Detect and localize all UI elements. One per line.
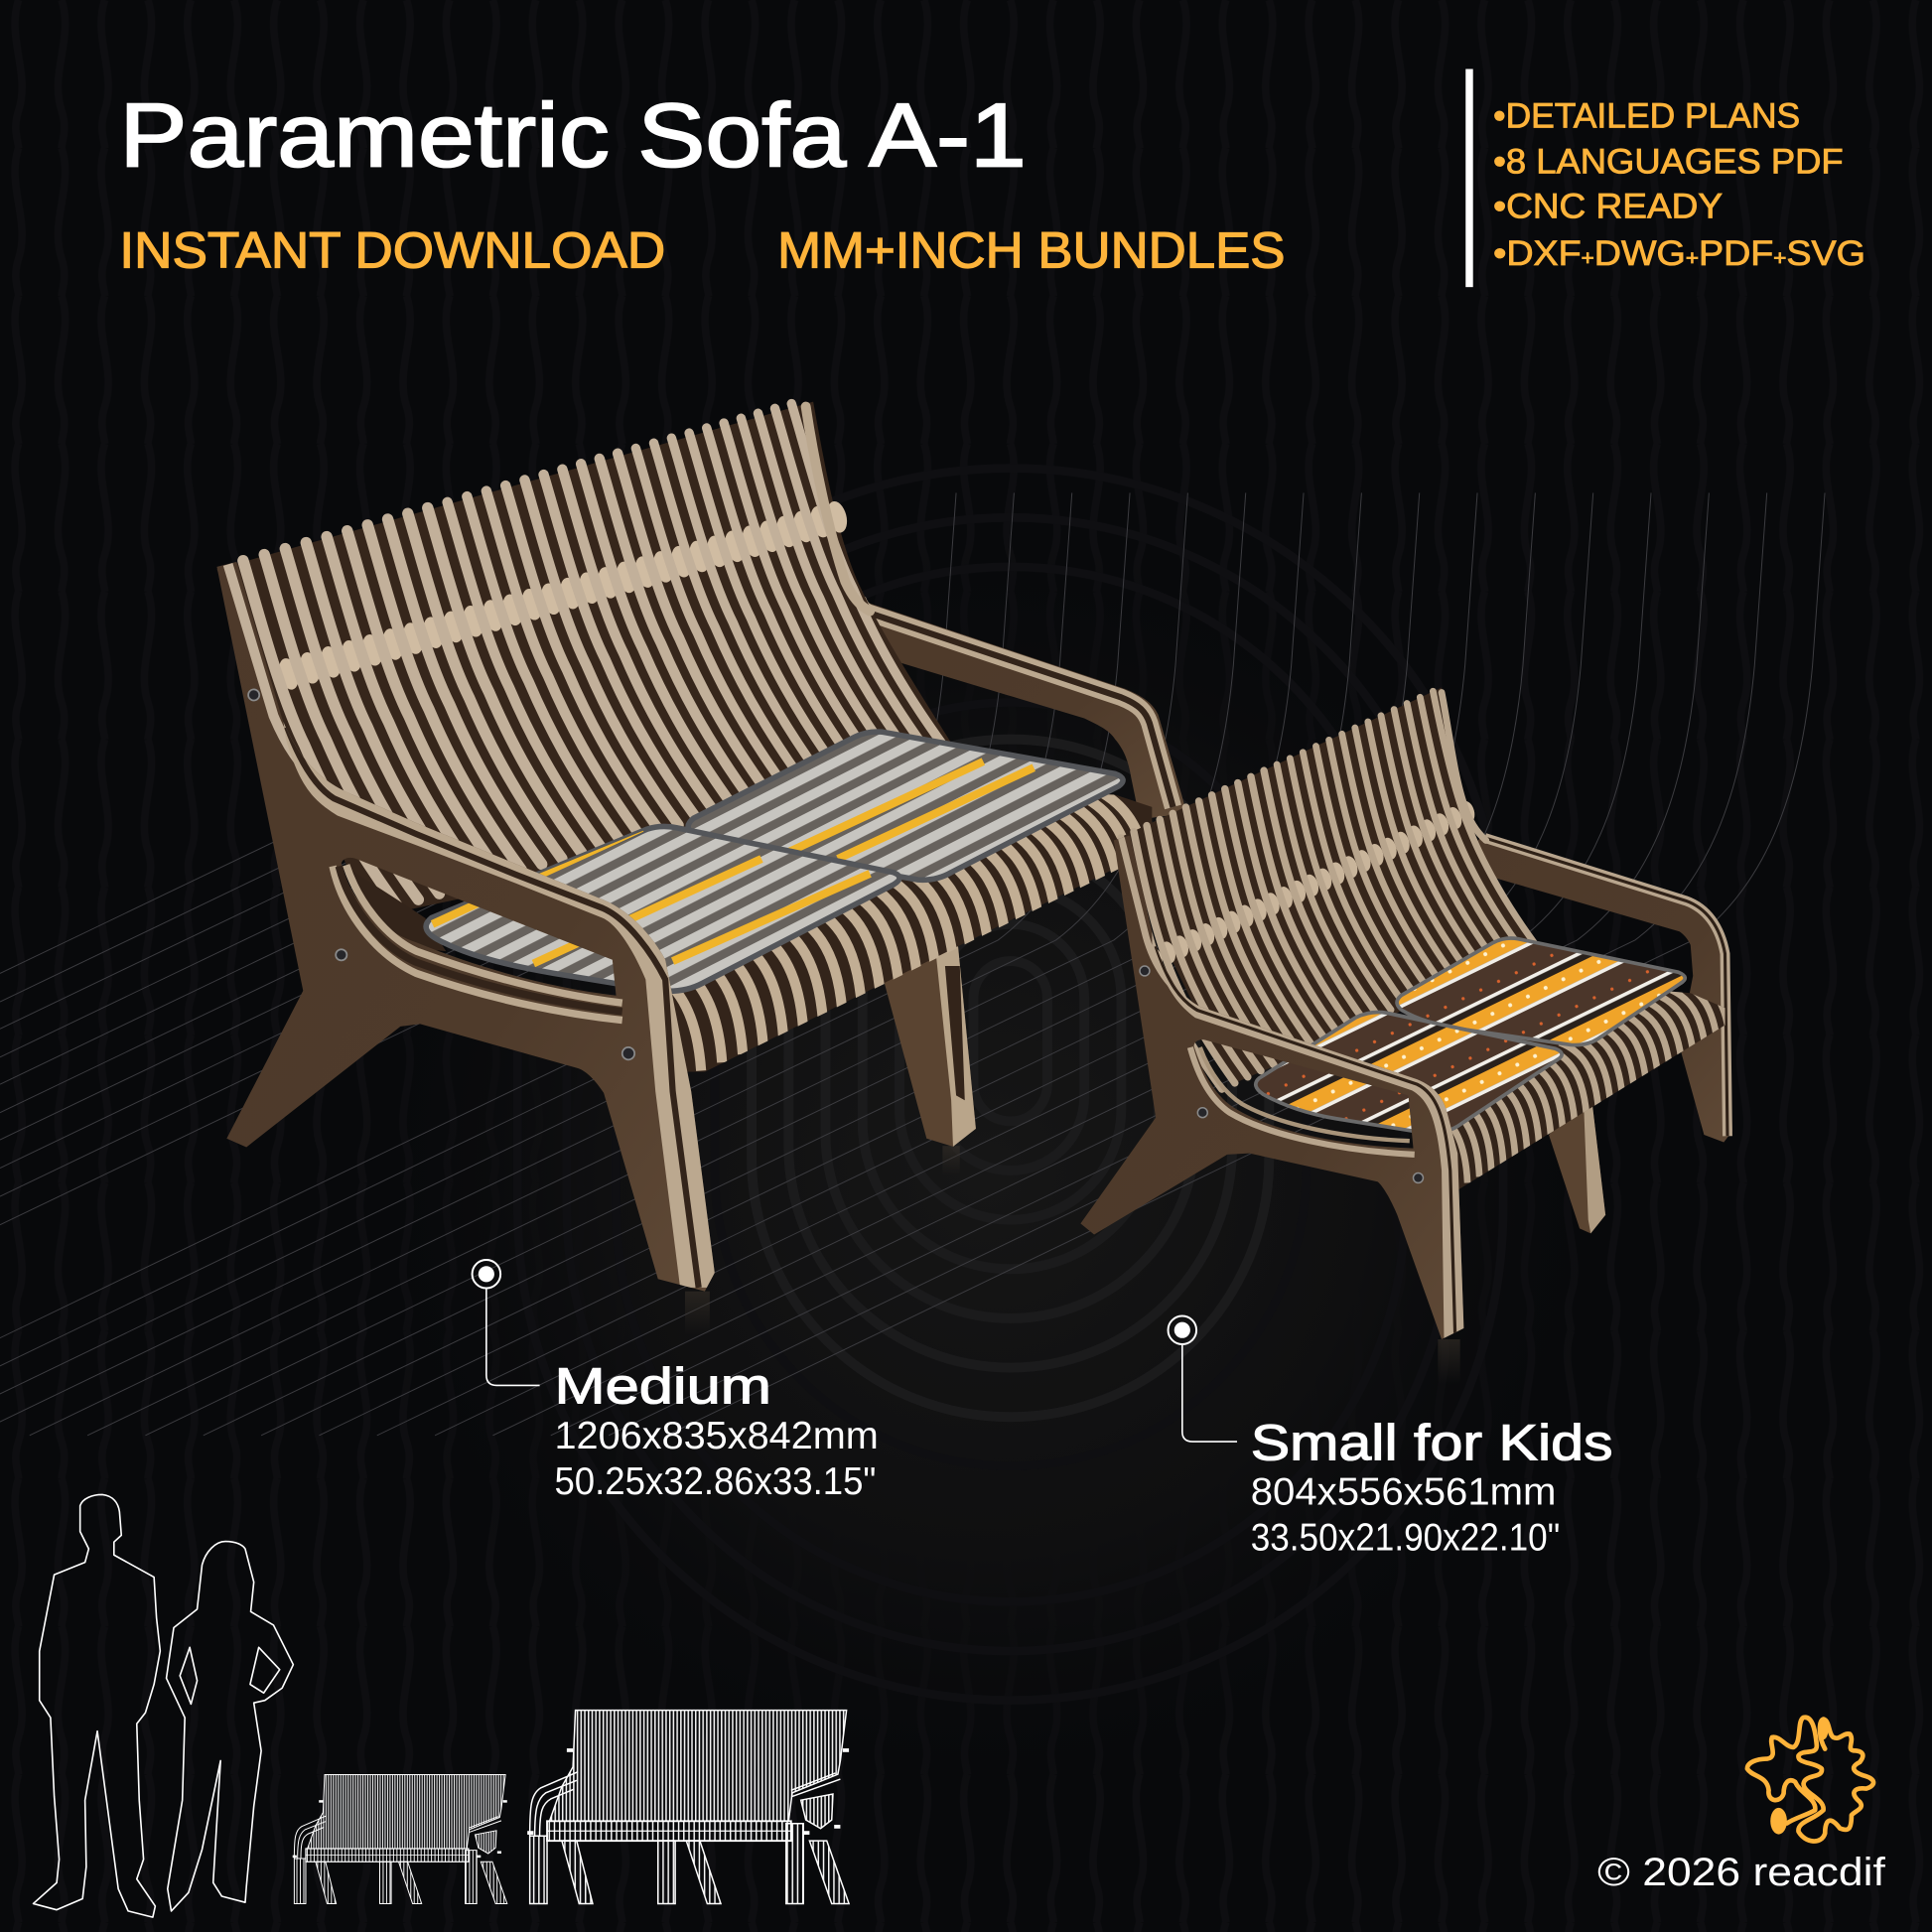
subtitle: bundles: MM+INCH BUNDLES <box>777 221 1285 278</box>
label: medium size: 50.25x32.86x33.15" <box>554 1460 876 1503</box>
label: small for kids size <box>1251 1415 1613 1559</box>
back patterned cushion <box>1397 938 1685 1045</box>
front gray cushion <box>426 826 899 991</box>
feature list: •CNC READY <box>1493 188 1723 226</box>
small sofa bolts <box>1140 966 1423 1182</box>
back slats <box>1114 688 1540 1089</box>
icon: reacdif logo <box>1747 1718 1873 1842</box>
far side panel and leg <box>1471 838 1732 1142</box>
far side panel and arm <box>850 583 1186 819</box>
icon: man silhouette <box>34 1494 160 1917</box>
icon: woman silhouette <box>167 1542 293 1911</box>
back gray cushion <box>688 732 1123 880</box>
label: medium size: 1206x835x842mm <box>554 1415 879 1457</box>
near side panel <box>1080 835 1478 1343</box>
near side panel <box>216 562 740 1292</box>
callout: small marker <box>1169 1315 1237 1442</box>
floor and wall guide lines <box>0 492 1825 1436</box>
vertical divider <box>1465 69 1473 287</box>
medium sofa <box>216 402 1186 1292</box>
line drawing: medium sofa <box>527 1711 849 1903</box>
label: small for kids size: Small for Kids <box>1251 1415 1613 1471</box>
callout: medium marker <box>473 1260 540 1385</box>
feature list: •8 LANGUAGES PDF <box>1493 142 1844 181</box>
seat front slats <box>672 794 1152 1072</box>
title: Parametric Sofa A-1 <box>119 86 1027 187</box>
line drawing: small sofa <box>293 1775 507 1903</box>
middle leg <box>884 897 976 1147</box>
middle leg <box>1549 1090 1605 1233</box>
back slats <box>216 402 954 918</box>
label: medium size: Medium <box>554 1358 771 1415</box>
label: small for kids size: 804x556x561mm <box>1251 1470 1556 1513</box>
floor reflections under feet <box>685 1146 1460 1384</box>
subtitle: instant download: INSTANT DOWNLOAD <box>119 221 665 278</box>
bolts <box>248 689 634 1059</box>
feature list: •DXF +DWG +PDF +SVG <box>1493 234 1865 273</box>
seat front slats <box>1451 991 1725 1189</box>
front patterned cushion <box>1256 1013 1562 1134</box>
feature list <box>1493 96 1865 273</box>
copyright: © 2026 reacdif <box>1597 1851 1886 1894</box>
label: small for kids size: 33.50x21.90x22.10" <box>1251 1516 1560 1559</box>
small sofa <box>1080 688 1732 1343</box>
feature list: •DETAILED PLANS <box>1493 96 1800 135</box>
opening backing behind near panel <box>345 866 446 951</box>
label: medium size <box>554 1358 879 1503</box>
